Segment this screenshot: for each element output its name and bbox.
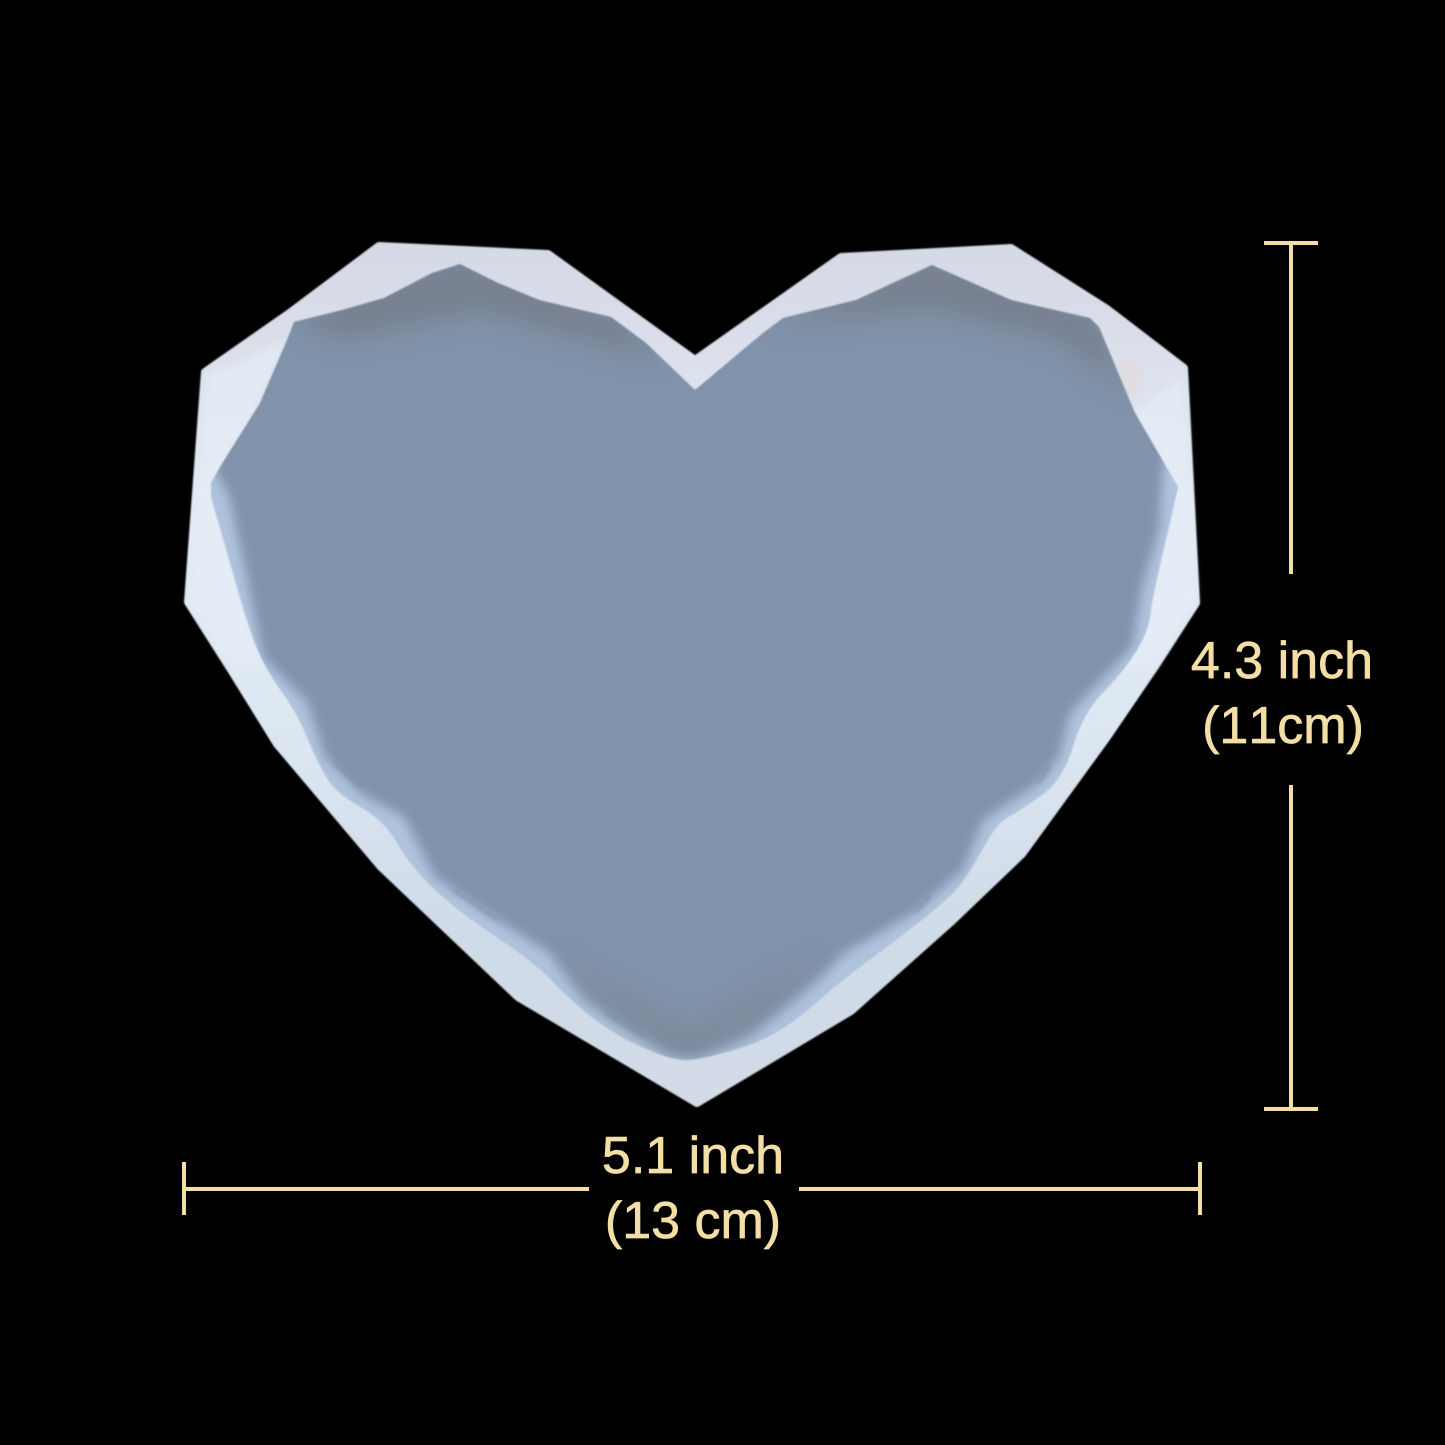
- height label: (11cm): [1202, 697, 1364, 755]
- height label: 4.3 inch: [1191, 632, 1373, 690]
- height dimension: [1191, 243, 1373, 1109]
- heart outer rim: [188, 246, 1196, 1103]
- height bracket lines: [1264, 243, 1318, 1109]
- right rim highlight: [1125, 376, 1195, 668]
- bevel creases: [335, 763, 1050, 1037]
- top-right shadow: [798, 265, 1118, 378]
- infographic canvas: [182, 241, 1370, 1250]
- right rim warm tint: [1118, 358, 1142, 398]
- width dimension: [184, 1127, 1200, 1250]
- width bracket lines: [184, 1162, 1200, 1215]
- width label: (13 cm): [605, 1192, 781, 1250]
- inner cavity: [210, 263, 1178, 1060]
- inner cavity surface: [210, 263, 1178, 1060]
- heart mold: [180, 200, 1200, 1103]
- bevel band: [210, 460, 1178, 1060]
- width label: [602, 1127, 784, 1250]
- width label: 5.1 inch: [602, 1127, 784, 1185]
- left rim highlight: [192, 342, 285, 668]
- bottom shading: [603, 991, 777, 1060]
- height label: [1191, 632, 1373, 755]
- cavity fill: [214, 264, 1168, 1060]
- top-left shadow: [300, 264, 650, 358]
